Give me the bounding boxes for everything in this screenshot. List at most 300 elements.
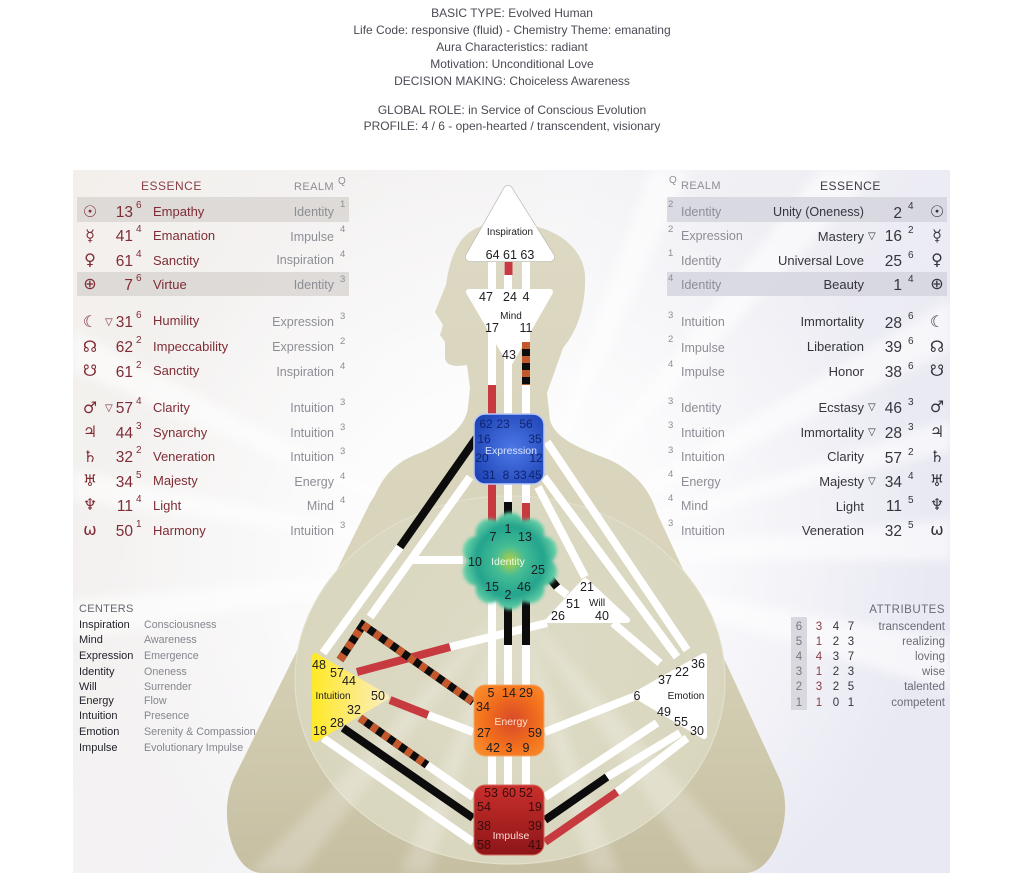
left rows: 61 (116, 364, 133, 381)
center: Expression: 20 (475, 451, 489, 465)
attributes legend: 4 (833, 621, 840, 633)
left rows: 34 (116, 474, 133, 491)
center: Energy: Energy (494, 716, 528, 728)
left rows: 4 (136, 396, 142, 407)
right table headings (669, 175, 881, 193)
center: Expression (474, 414, 544, 484)
left rows: Mind (307, 499, 334, 513)
center: Impulse: 60 (502, 786, 516, 800)
left rows: Clarity (153, 400, 190, 415)
right table headings: ESSENCE (820, 179, 881, 193)
attributes legend: 5 (796, 636, 802, 648)
right rows: 3 (668, 420, 673, 431)
right rows: 3 (908, 422, 914, 433)
center: Energy: 34 (476, 700, 490, 714)
left table headings: ESSENCE (141, 179, 202, 193)
left rows: 6 (136, 200, 142, 211)
right rows: Ecstasy (818, 400, 864, 415)
left highlight bars (77, 197, 349, 296)
center: Will: 40 (595, 609, 609, 623)
right rows: ☿ (932, 226, 942, 245)
right rows: Intuition (681, 426, 725, 440)
centers legend: Mind (79, 634, 103, 646)
left rows: 4 (136, 494, 142, 505)
right rows: 4 (668, 273, 673, 284)
right rows: 3 (668, 396, 673, 407)
center: Impulse: 19 (528, 800, 542, 814)
attributes legend: talented (904, 681, 945, 693)
right rows: 6 (908, 250, 914, 261)
left rows: 44 (116, 425, 133, 442)
left rows: ♃ (83, 422, 97, 441)
left rows: 3 (340, 446, 345, 457)
centers legend: Presence (144, 710, 189, 722)
left rows: ☿ (85, 226, 95, 245)
center: Expression: 12 (529, 451, 543, 465)
center: Emotion: 6 (634, 689, 641, 703)
center: Will: 21 (580, 580, 594, 594)
right rows: Energy (681, 475, 721, 489)
attributes legend: 3 (848, 636, 854, 648)
center: Identity (463, 512, 557, 610)
center: Inspiration: 64 61 63 (486, 248, 534, 262)
left rows: 4 (340, 249, 345, 260)
background panel with light rays (73, 170, 950, 873)
center: Emotion: 55 (674, 715, 688, 729)
header text block: GLOBAL ROLE: in Service of Conscious Evolution (378, 103, 646, 117)
left rows: ▽ (105, 403, 113, 414)
left rows: ♀ (84, 250, 96, 269)
left rows: Empathy (153, 204, 205, 219)
right rows: ♅ (930, 471, 944, 490)
center: Impulse: 53 (484, 786, 498, 800)
centers legend: Inspiration (79, 619, 130, 631)
left rows: 4 (340, 471, 345, 482)
left rows: ▽ (105, 317, 113, 328)
right rows: ☉ (930, 202, 944, 221)
center: Energy: 9 (523, 741, 530, 755)
center: Mind: 47 (479, 290, 493, 304)
inner oval (295, 496, 725, 864)
centers legend: Impulse (79, 742, 118, 754)
left rows: ☋ (83, 361, 97, 380)
center: Intuition: Intuition (315, 691, 351, 702)
centers legend: Expression (79, 650, 133, 662)
right rows: 3 (908, 397, 914, 408)
centers legend: Emergence (144, 650, 199, 662)
left rows: Emanation (153, 228, 215, 243)
right rows: Immortality (800, 425, 864, 440)
left rows: Impeccability (153, 339, 229, 354)
left rows: Intuition (290, 401, 334, 415)
center: Impulse: 38 (477, 819, 491, 833)
right rows: Universal Love (778, 253, 864, 268)
left rows: 1 (136, 519, 142, 530)
right rows: ⊕ (930, 274, 944, 293)
attributes legend: realizing (902, 636, 945, 648)
left rows (83, 199, 345, 540)
attributes legend: transcendent (878, 621, 946, 633)
striped orange and black gates (340, 625, 473, 765)
right rows: Light (836, 499, 864, 514)
left rows: 13 (116, 204, 133, 221)
center: Will: Will (589, 598, 605, 609)
center: Impulse: 39 (528, 819, 542, 833)
right rows: ♆ (930, 495, 944, 514)
right rows: 2 (668, 334, 673, 345)
left rows: ☾ (83, 312, 97, 331)
center: Will (549, 580, 627, 623)
left rows: 41 (116, 228, 133, 245)
attributes legend: 0 (833, 697, 839, 709)
center: Intuition: 44 (342, 674, 356, 688)
center: Energy: 14 (502, 686, 516, 700)
right rows: Beauty (824, 277, 864, 292)
left rows: Synarchy (153, 425, 208, 440)
right highlight bars (667, 197, 947, 296)
right rows: ☾ (930, 312, 944, 331)
left rows: Virtue (153, 277, 187, 292)
right rows: 3 (668, 445, 673, 456)
right rows: ☋ (930, 361, 944, 380)
attributes legend: loving (915, 651, 945, 663)
attributes legend: 3 (796, 666, 802, 678)
right rows: Expression (681, 229, 743, 243)
center: Impulse: 58 (477, 838, 491, 852)
center: Intuition (312, 656, 386, 739)
attributes legend: 4 (816, 651, 823, 663)
centers legend: Evolutionary Impulse (144, 742, 243, 754)
left rows: ♂ (83, 398, 97, 417)
center: Identity: 46 (517, 580, 531, 594)
center: Emotion: 30 (690, 724, 704, 738)
left rows: Veneration (153, 449, 215, 464)
left rows: ♅ (83, 471, 97, 490)
center: Intuition: 32 (347, 703, 361, 717)
right rows: Mind (681, 499, 708, 513)
centers legend: Oneness (144, 666, 187, 678)
centers legend: Identity (79, 666, 115, 678)
center: Impulse: 52 (519, 786, 533, 800)
left rows: 4 (340, 224, 345, 235)
centers legend: Awareness (144, 634, 197, 646)
right rows: Identity (681, 254, 722, 268)
right rows: 3 (668, 310, 673, 321)
center: Energy: 5 (488, 686, 495, 700)
header text block: PROFILE: 4 / 6 - open-hearted / transcendent, visionary (364, 119, 660, 133)
right rows: 39 (885, 339, 902, 356)
right rows: ♂ (930, 397, 944, 416)
right rows: 28 (885, 425, 902, 442)
right rows: 25 (885, 253, 902, 270)
center: Emotion: 37 (658, 673, 672, 687)
header text block: BASIC TYPE: Evolved Human (431, 6, 593, 20)
attributes legend: 7 (848, 621, 854, 633)
right rows: Veneration (802, 523, 864, 538)
left rows: 4 (340, 495, 345, 506)
left rows: 62 (116, 339, 133, 356)
centers legend: Consciousness (144, 619, 216, 631)
left rows: 50 (116, 523, 133, 540)
right rows: Intuition (681, 315, 725, 329)
right rows: 5 (908, 520, 914, 531)
right rows (668, 199, 944, 540)
right rows: 28 (885, 315, 902, 332)
center: Identity: 25 (531, 563, 545, 577)
attributes legend: 5 (848, 681, 854, 693)
right rows: 2 (668, 199, 673, 210)
attributes legend: 6 (796, 621, 802, 633)
attributes legend: 1 (796, 697, 802, 709)
center: Identity: 2 (505, 588, 512, 602)
right rows: ♄ (930, 447, 944, 466)
left essence table (77, 176, 349, 540)
attributes legend: 2 (833, 681, 839, 693)
left table headings (141, 176, 346, 193)
left table headings: Q (338, 176, 346, 187)
right rows: ♀ (931, 250, 943, 269)
right rows: 34 (885, 474, 902, 491)
right rows: Clarity (827, 449, 864, 464)
center: Impulse: 54 (477, 800, 491, 814)
center: Expression: 23 (496, 417, 510, 431)
left rows: 31 (116, 314, 133, 331)
left rows: ♄ (83, 447, 97, 466)
center: Expression: 62 (479, 417, 493, 431)
center: Energy: 59 (528, 726, 542, 740)
center: Mind (469, 290, 550, 385)
left rows: 4 (136, 249, 142, 260)
right rows: 4 (668, 359, 673, 370)
header text block: Motivation: Unconditional Love (430, 57, 594, 71)
left rows: Impulse (290, 230, 334, 244)
header text block: Life Code: responsive (fluid) - Chemistry Theme: emanating (353, 23, 671, 37)
left rows: 1 (340, 199, 345, 210)
right rows: Impulse (681, 341, 725, 355)
centers legend: Will (79, 681, 97, 693)
center: Expression: Expression (485, 445, 537, 457)
center: Mind: 24 (503, 290, 517, 304)
right rows: Immortality (800, 314, 864, 329)
attributes legend: 1 (816, 697, 822, 709)
left rows: Intuition (290, 450, 334, 464)
center: Mind: 11 (520, 321, 533, 335)
attributes legend: 3 (848, 666, 854, 678)
right rows: Mastery (818, 229, 864, 244)
centers legend: CENTERS (79, 603, 134, 615)
attributes legend: 1 (816, 666, 822, 678)
body silhouette (227, 222, 785, 873)
header text block: Aura Characteristics: radiant (436, 40, 588, 54)
centers legend: Serenity & Compassion (144, 726, 256, 738)
centers legend: Surrender (144, 681, 192, 693)
left rows: Identity (294, 278, 335, 292)
left rows: Sanctity (153, 253, 200, 268)
center: Energy: 42 (486, 741, 500, 755)
right rows: 1 (668, 248, 673, 259)
left rows: Harmony (153, 523, 206, 538)
left rows: 2 (136, 445, 142, 456)
center: Identity: 7 (490, 530, 497, 544)
left table headings: REALM (294, 181, 334, 193)
right rows: 5 (908, 495, 914, 506)
left rows: Inspiration (276, 253, 334, 267)
left rows: Expression (272, 340, 334, 354)
right rows: Impulse (681, 365, 725, 379)
center: Energy (474, 685, 544, 756)
left rows: 4 (136, 224, 142, 235)
bodygraph channels (323, 262, 687, 842)
right rows: 3 (668, 518, 673, 529)
left rows: 3 (136, 421, 142, 432)
left rows: 11 (117, 498, 133, 515)
attributes legend: 3 (833, 651, 839, 663)
right rows: ♃ (930, 422, 944, 441)
left rows: Sanctity (153, 363, 200, 378)
right rows: Unity (Oneness) (773, 205, 864, 219)
attributes legend: wise (921, 666, 945, 678)
attributes legend: 3 (816, 681, 822, 693)
attributes legend: 4 (796, 651, 803, 663)
center: Energy: 29 (519, 686, 533, 700)
right rows: 38 (885, 364, 902, 381)
center: Impulse: Impulse (493, 830, 530, 842)
centers legend (79, 603, 256, 754)
right rows: Intuition (681, 450, 725, 464)
left rows: 7 (124, 277, 133, 294)
striped gate 11 (522, 342, 530, 385)
right rows: Intuition (681, 524, 725, 538)
right rows: 2 (893, 205, 902, 222)
center: Will: 26 (551, 609, 565, 623)
left rows: Intuition (290, 524, 334, 538)
center: Impulse (474, 785, 544, 855)
attributes legend: 2 (833, 636, 839, 648)
center: Identity: 1 (505, 522, 512, 536)
center: Expression: 45 (528, 468, 542, 482)
right rows: 4 (668, 493, 673, 504)
right rows: 4 (908, 274, 914, 285)
right rows: 57 (885, 450, 902, 467)
right rows: Identity (681, 278, 722, 292)
right rows: Identity (681, 401, 722, 415)
center: Mind: 43 (502, 348, 516, 362)
center: Expression: 35 (528, 432, 542, 446)
left rows: 2 (136, 360, 142, 371)
right table headings: REALM (681, 180, 721, 192)
left rows: Light (153, 498, 182, 513)
center: Emotion (634, 656, 705, 738)
attributes legend: 1 (816, 636, 822, 648)
center: Expression: 16 (477, 432, 491, 446)
left rows: 32 (116, 449, 133, 466)
center: Intuition: 57 (330, 666, 344, 680)
center: Inspiration: Inspiration (487, 227, 533, 238)
center: Energy: 27 (477, 726, 491, 740)
left rows: ☉ (83, 202, 97, 221)
black gates (343, 437, 607, 820)
right rows: 6 (908, 336, 914, 347)
right rows: 32 (885, 523, 902, 540)
center: Expression: 33 (513, 468, 527, 482)
left rows: 3 (340, 520, 345, 531)
center: Expression: 31 (482, 468, 496, 482)
right rows: 1 (893, 277, 902, 294)
center: Energy: 3 (506, 741, 513, 755)
center: Identity: 15 (485, 580, 499, 594)
center: Expression: 56 (519, 417, 533, 431)
center: Expression: 8 (503, 468, 510, 482)
right essence table (667, 175, 947, 540)
center: Identity: Identity (491, 556, 526, 568)
center: Identity: 13 (518, 530, 532, 544)
center: Emotion: 49 (657, 705, 671, 719)
center: Emotion: 36 (691, 657, 705, 671)
left rows: 3 (340, 422, 345, 433)
left rows: Intuition (290, 426, 334, 440)
left rows: 61 (116, 253, 133, 270)
center: Intuition: 28 (330, 716, 344, 730)
left rows: Humility (153, 313, 200, 328)
center: Intuition: 50 (371, 689, 385, 703)
right rows: 4 (668, 469, 673, 480)
attributes legend: ATTRIBUTES (869, 604, 945, 616)
attributes legend: 1 (848, 697, 854, 709)
attributes legend: 2 (796, 681, 802, 693)
right rows: 11 (886, 498, 902, 515)
right rows: 46 (885, 400, 902, 417)
left rows: 57 (116, 400, 133, 417)
red gates (357, 262, 617, 842)
center: Emotion: 22 (675, 665, 689, 679)
right rows: 16 (885, 228, 902, 245)
left rows: 4 (340, 361, 345, 372)
left rows: ♆ (83, 495, 97, 514)
attributes legend: 7 (848, 651, 854, 663)
right rows: Identity (681, 205, 722, 219)
right rows: ▽ (868, 476, 876, 487)
right rows: 4 (908, 201, 914, 212)
center: Mind: 4 (523, 290, 530, 304)
centers legend: Flow (144, 695, 167, 707)
right rows: 2 (908, 447, 914, 458)
center: Mind: 17 (485, 321, 499, 335)
centers legend: Energy (79, 695, 114, 707)
left rows: 6 (136, 310, 142, 321)
centers legend: Emotion (79, 726, 119, 738)
center: Emotion: Emotion (668, 691, 704, 702)
right rows: Majesty (819, 474, 864, 489)
left rows: Energy (294, 475, 335, 489)
right rows: 4 (908, 471, 914, 482)
centers legend: Intuition (79, 710, 118, 722)
center: Identity: 10 (468, 555, 482, 569)
attributes legend: 2 (833, 666, 839, 678)
left rows: 2 (136, 335, 142, 346)
left rows: Inspiration (276, 365, 334, 379)
left rows: Expression (272, 315, 334, 329)
left rows: 5 (136, 470, 142, 481)
right rows: 6 (908, 311, 914, 322)
right rows: ω (930, 520, 944, 539)
attributes legend: competent (891, 697, 946, 709)
left rows: ⊕ (83, 274, 97, 293)
right rows: ▽ (868, 402, 876, 413)
left rows: Identity (294, 205, 335, 219)
left rows: ☊ (83, 337, 97, 356)
white channels (323, 262, 687, 842)
center: Intuition: 18 (313, 724, 327, 738)
